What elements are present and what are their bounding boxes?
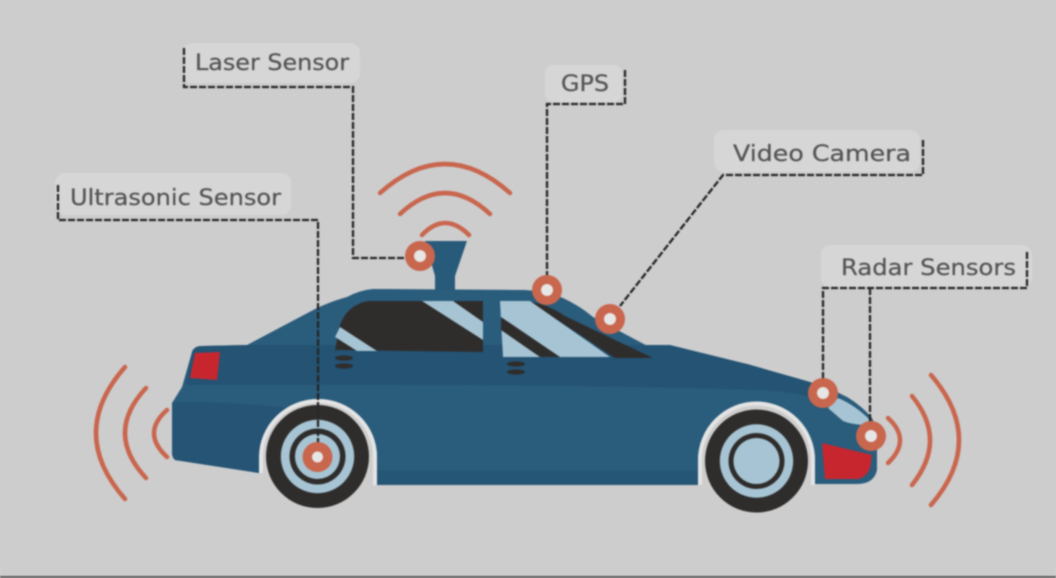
label: Radar Sensors (821, 245, 1032, 422)
front door window (500, 301, 610, 357)
rear window (335, 301, 483, 352)
sensor marker: radar front (856, 421, 886, 451)
label: GPS: GPS (561, 72, 609, 97)
rear sound waves (96, 367, 167, 499)
windshield dark band (530, 302, 653, 358)
car body (172, 289, 877, 485)
sensor marker: video camera (595, 304, 625, 334)
label: GPS (545, 65, 625, 278)
body shell (172, 289, 877, 485)
rear window reflection small (335, 327, 377, 351)
front door handle (507, 361, 525, 375)
sensor marker: laser (405, 241, 435, 271)
bottom border (0, 576, 1056, 578)
label: Video Camera: Video Camera (733, 142, 911, 167)
front bumper light (822, 443, 872, 479)
roof antenna (425, 241, 467, 292)
rear bumper shade (172, 402, 290, 473)
sensor marker: radar top (808, 378, 838, 408)
label: Laser Sensor: Laser Sensor (195, 51, 350, 76)
tail light (190, 352, 220, 380)
label: Radar Sensors: Radar Sensors (841, 256, 1016, 281)
rear wheel (266, 405, 369, 508)
front wheel (705, 410, 808, 512)
rear door handle (335, 355, 353, 369)
upper body shade (186, 345, 835, 404)
headlight (828, 398, 870, 425)
wheel arch highlights (261, 401, 813, 485)
sensor marker: GPS (532, 275, 562, 305)
label: Laser Sensor (183, 43, 406, 258)
laser signal arcs (380, 164, 510, 235)
label: Ultrasonic Sensor: Ultrasonic Sensor (70, 186, 282, 211)
sensor marker: ultrasonic (302, 442, 332, 472)
label: Video Camera (620, 130, 923, 306)
front door window stripe (501, 317, 560, 357)
label: Ultrasonic Sensor (55, 173, 318, 452)
front sound waves (888, 375, 959, 505)
lower body shade (377, 470, 698, 485)
rear window reflection large (422, 301, 483, 340)
